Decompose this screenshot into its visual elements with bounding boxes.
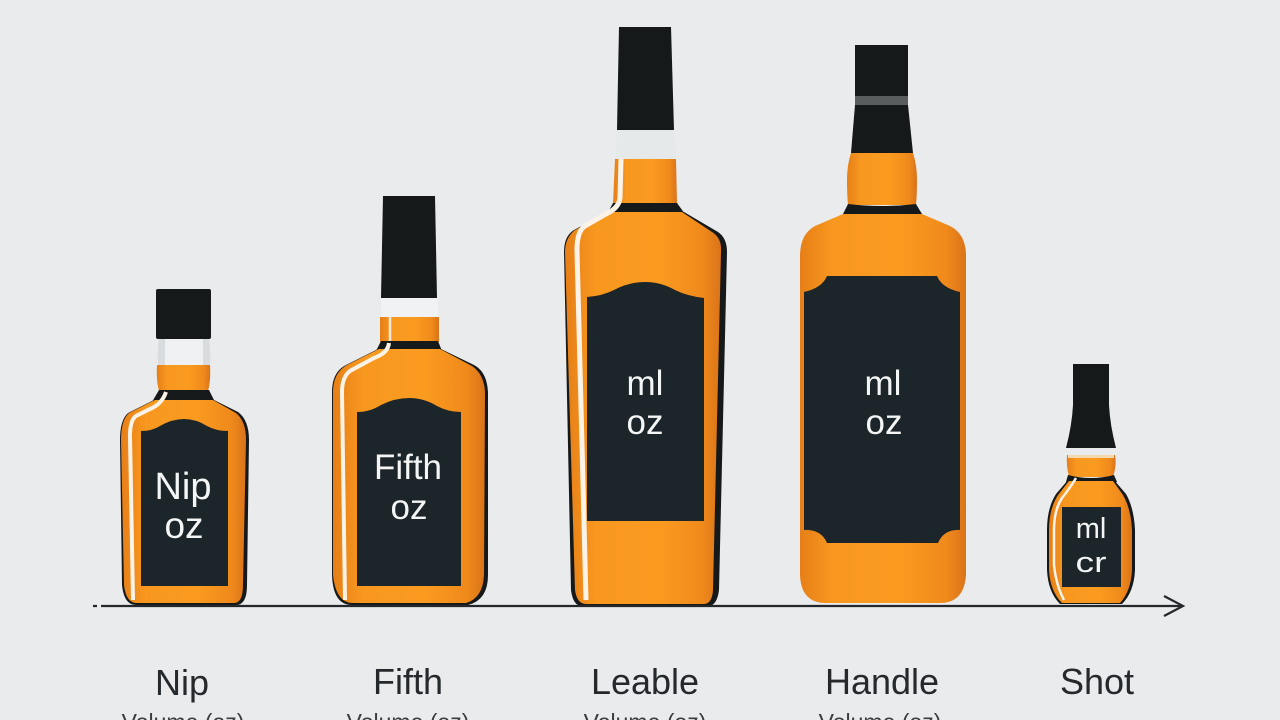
bottle: Shot	[1047, 364, 1135, 604]
cap band	[855, 96, 908, 105]
bottle name: Fifth: Fifth	[373, 661, 443, 702]
label text: ml oz	[865, 364, 902, 442]
bottle name: Shot: Shot	[1060, 661, 1134, 702]
cap	[1066, 364, 1116, 448]
label text: Fifth oz	[374, 448, 442, 527]
label text: Nip oz: Nip	[154, 466, 212, 508]
label	[587, 282, 704, 521]
liquid neck	[613, 159, 677, 204]
body	[1047, 480, 1135, 604]
highlight	[342, 343, 389, 600]
label text: Nip oz: oz	[164, 505, 204, 546]
label text: ml oz: ml	[627, 364, 663, 403]
cap	[617, 27, 674, 130]
label	[141, 419, 228, 586]
body	[120, 400, 249, 605]
glass neck	[381, 298, 438, 317]
label text: Nip oz	[154, 466, 212, 546]
bottle: Fifth	[332, 196, 488, 605]
label	[357, 398, 461, 586]
label	[804, 276, 960, 543]
body	[332, 349, 488, 605]
collar	[1066, 475, 1117, 484]
bottle: Nip	[120, 289, 249, 605]
glass neck	[158, 339, 210, 366]
liquid neck	[380, 317, 439, 342]
bottle name: Leable: Leable	[591, 661, 699, 702]
bottle name: Leable	[584, 661, 706, 720]
label text: Fifth oz: Fifth	[374, 448, 442, 487]
bottle: Leable	[564, 27, 727, 606]
highlight	[1054, 478, 1076, 600]
highlight	[130, 392, 166, 600]
label text: ml oz: oz	[866, 403, 902, 442]
bottle name: Nip: Nip	[155, 662, 209, 703]
label text: ml oz: oz	[627, 403, 663, 442]
label text: ml cr	[1076, 513, 1107, 579]
axis arrow	[93, 596, 1183, 616]
label text: Fifth oz: oz	[391, 488, 427, 527]
lower cap	[851, 105, 913, 153]
collar	[376, 341, 442, 351]
cap	[381, 196, 437, 298]
glass neck	[615, 130, 676, 159]
label text: ml cr: cr	[1076, 547, 1107, 579]
bottle name: Fifth	[347, 661, 469, 720]
bottle: Handle	[800, 45, 966, 603]
label text: ml oz: ml	[865, 364, 901, 403]
bottle name: Nip	[122, 662, 244, 720]
collar	[607, 203, 685, 214]
label text: ml oz	[627, 364, 663, 442]
bottle name: Handle	[819, 661, 941, 720]
bottle name: Handle: Handle	[825, 661, 939, 702]
liquid neck	[847, 153, 917, 205]
liquid neck	[157, 365, 210, 391]
cap	[855, 45, 908, 97]
body	[800, 214, 966, 603]
label	[1062, 507, 1121, 587]
collar	[843, 204, 922, 214]
liquid neck	[1067, 455, 1116, 477]
body	[564, 212, 727, 606]
highlight	[577, 159, 621, 600]
collar	[152, 390, 215, 402]
cap	[156, 289, 211, 339]
label text: ml cr: ml	[1076, 513, 1106, 545]
